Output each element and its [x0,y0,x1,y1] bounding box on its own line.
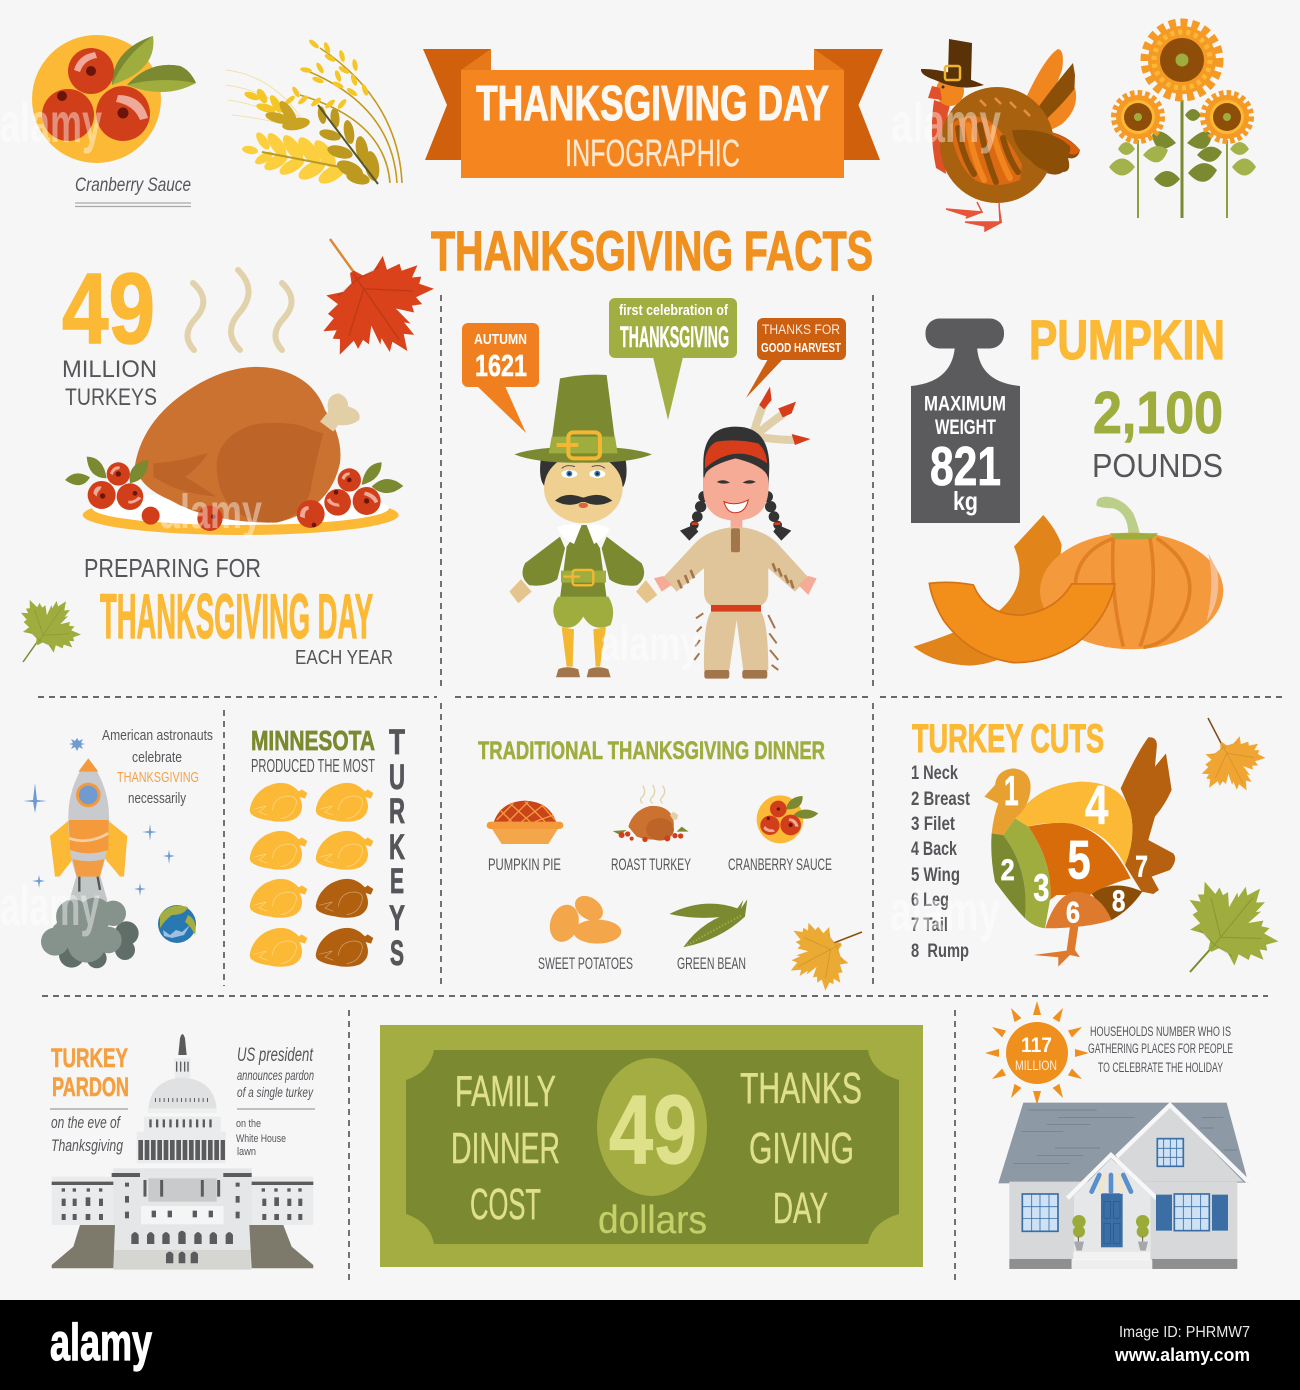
footer: website: www.alamy.com [1114,1345,1250,1365]
heading: turkey pardon: PARDON [52,1072,129,1102]
text: astronauts celebrate: THANKSGIVING [117,769,199,786]
text: white house lawn: White House [236,1133,286,1145]
text: us president: of a single turkey [237,1084,314,1100]
heading: preparing for thanksgiving day: PREPARING FOR [84,553,261,583]
vertical word: turkeys: Y [389,899,405,938]
text: astronauts celebrate: celebrate [132,749,182,766]
icon: capitol building [52,1034,313,1270]
label: million turkeys [62,356,157,411]
list: cuts: 7 Tail [911,915,948,936]
panel: family dinner cost bill [380,1025,923,1267]
text: family dinner cost: DINNER [451,1124,560,1173]
icon: cranberry sauce [32,35,196,163]
vertical word: turkeys: K [389,828,405,867]
panel: turkey pardon [50,1034,315,1270]
stock watermark: alamy [600,618,700,671]
icon: red maple leaf [305,239,454,384]
speech bubble: good harvest [746,318,846,398]
text: thanks giving day [740,1064,862,1233]
icon: house [998,1103,1248,1269]
caption: cranberry sauce: Cranberry Sauce [75,175,191,196]
text: astronauts celebrate: necessarily [128,790,186,807]
icon: stars [23,738,175,896]
heading: turkey pardon [51,1043,129,1102]
speech bubble: first celebration [609,298,737,420]
icon: cranberry bowl [757,795,818,843]
list: cuts [911,763,971,962]
stock watermark: alamy [0,91,102,154]
text: white house lawn: lawn [237,1146,256,1158]
vertical word: turkeys [389,723,405,973]
vertical word: turkeys: T [389,723,405,762]
footer logo: alamy: alamy [50,1314,152,1372]
text: white house lawn: on the [236,1118,261,1130]
text: us president [237,1045,314,1100]
diagram: turkey cuts: 2 [1001,854,1015,887]
character: pilgrim [509,375,657,677]
heading: preparing for thanksgiving day [84,553,393,669]
text: households number: HOUSEHOLDS NUMBER WHO IS [1090,1024,1231,1039]
heading: minnesota: MINNESOTA [251,725,375,756]
footer: image id: Image ID: PHRMW7 [1119,1324,1250,1341]
diagram: turkey cuts: 7 [1135,851,1148,884]
panel: traditional dinner [478,737,862,1001]
icon: sweet potatoes [545,891,621,946]
list: cuts: 8 Rump [911,941,969,962]
speech bubble: first celebration: first celebration of [619,302,729,319]
heading: preparing for thanksgiving day: EACH YEAR [295,647,393,669]
speech bubble: first celebration: THANKSGIVING [620,321,729,354]
icon: earth [158,905,196,943]
icon: roast turkey on plate [65,367,403,535]
icon: wheat bundle [226,38,402,188]
list: cuts: 4 Back [911,839,957,860]
icon: rocket [41,758,139,968]
text: white house lawn [236,1118,286,1158]
list: cuts: 6 Leg [911,890,949,911]
list: cuts: 2 Breast [911,789,971,810]
caption: cranberry sauce [75,175,191,206]
vertical word: turkeys: E [390,862,404,901]
icon: pumpkin pie [487,801,563,844]
text: thanks giving day: GIVING [749,1124,854,1173]
list: cuts: 3 Filet [911,814,956,835]
icon: sun badge: 117 [1021,1034,1052,1057]
stock watermark: alamy [0,874,100,937]
label: million turkeys: MILLION [62,356,157,383]
vertical word: turkeys: S [390,934,404,973]
panel: minnesota turkeys [250,723,405,973]
label: pumpkin pie: PUMPKIN PIE [488,855,561,874]
panel: households [985,1001,1248,1269]
heading: thanksgiving facts: THANKSGIVING FACTS [431,219,873,282]
icon: steam [187,270,292,350]
banner subtitle: INFOGRAPHIC [565,133,740,175]
pictogram: eight turkeys [250,783,373,967]
heading: turkey cuts: TURKEY CUTS [912,717,1104,761]
icon: weight: 821 [930,435,1001,497]
label: sweet potatoes: SWEET POTATOES [538,954,633,973]
icon: orange maple leaf [1193,718,1275,805]
icon: sunflowers [1109,23,1256,218]
text: households number: TO CELEBRATE THE HOLIDAY [1098,1060,1223,1075]
heading: pumpkin: PUMPKIN [1029,308,1225,371]
speech bubble: autumn 1621: 1621 [475,348,527,383]
icon: pumpkin with slices [913,497,1223,666]
stock watermark: alamy [160,486,262,539]
banner heading: THANKSGIVING DAY [476,77,829,131]
banner: title ribbon [423,49,883,178]
panel: 49 million turkeys [11,239,454,669]
diagram: turkey cuts: 6 [1066,896,1080,929]
text: on the eve: on the eve of [51,1113,122,1132]
icon: roast turkey [613,785,689,842]
icon: pilgrim turkey [921,39,1080,231]
diagram: turkey cuts: 5 [1067,828,1091,890]
text: on the eve [51,1113,123,1155]
diagram: turkey cuts [984,737,1175,967]
heading: traditional dinner: TRADITIONAL THANKSGIVING DINNER [478,737,825,765]
text: households number [1088,1024,1233,1075]
icon: orange leaf [775,914,862,1001]
number: 2,100: 2,100 [1093,380,1223,446]
vertical word: turkeys: R [389,792,405,831]
text: family dinner cost [451,1067,560,1229]
panel: turkey cuts [911,717,1297,981]
dashed dividers [38,295,1287,1280]
text: thanks giving day: DAY [773,1184,828,1233]
stock watermark: alamy [891,91,1001,154]
icon: green leaf [11,584,92,662]
heading: turkey pardon: TURKEY [51,1043,128,1073]
icon: green beans [669,899,747,947]
label: million turkeys: TURKEYS [65,384,157,411]
character: native american [654,387,817,679]
text: family dinner cost: COST [470,1180,541,1229]
label: cranberry sauce: CRANBERRY SAUCE [728,855,832,874]
stock watermark: alamy [890,879,1000,942]
icon: weight [911,318,1020,523]
speech bubble: autumn 1621: AUTUMN [474,331,527,348]
icon: sun badge: MILLION [1015,1057,1057,1073]
text: family dinner cost: FAMILY [455,1067,556,1116]
icon: weight: MAXIMUM [924,392,1006,416]
text: us president: US president [237,1045,313,1066]
icon: weight: kg [953,486,978,516]
icon: sun badge [985,1001,1089,1105]
speech bubble: autumn 1621 [462,323,539,433]
vertical word: turkeys: U [389,758,405,797]
subheading: produced the most: PRODUCED THE MOST [251,756,375,776]
label: pounds: POUNDS [1092,447,1223,484]
text: us president: announces pardon [237,1067,314,1083]
panel: pumpkin [911,308,1225,666]
diagram: turkey cuts: 3 [1033,867,1049,910]
list: cuts: 1 Neck [911,763,958,784]
panel: 49 million turkeys: THANKSGIVING DAY [100,582,373,652]
icon: weight: WEIGHT [935,416,996,439]
speech bubble: good harvest: GOOD HARVEST [761,340,841,355]
text: thanks giving day: THANKS [740,1064,862,1113]
oval [597,1058,707,1196]
panel: astronauts [23,727,213,968]
list: cuts: 5 Wing [911,865,960,886]
stock watermark [0,91,1001,942]
number: 49: 49 [609,1075,697,1184]
text: astronauts celebrate [102,727,213,807]
diagram: turkey cuts: 1 [1004,767,1019,814]
icon: green maple leaf [1173,859,1297,981]
panel: first thanksgiving characters [462,298,846,679]
diagram: turkey cuts: 8 [1112,885,1125,918]
text: astronauts celebrate: American astronauts [102,727,213,744]
text: on the eve: Thanksgiving [51,1136,123,1155]
number: 49: 49 [62,253,155,365]
label: dollars: dollars [598,1199,707,1242]
footer bar [0,1300,1300,1390]
speech bubble: good harvest: THANKS FOR [762,322,840,337]
label: roast turkey: ROAST TURKEY [611,855,691,874]
diagram: turkey cuts: 4 [1085,773,1109,835]
label: green bean: GREEN BEAN [677,954,746,973]
